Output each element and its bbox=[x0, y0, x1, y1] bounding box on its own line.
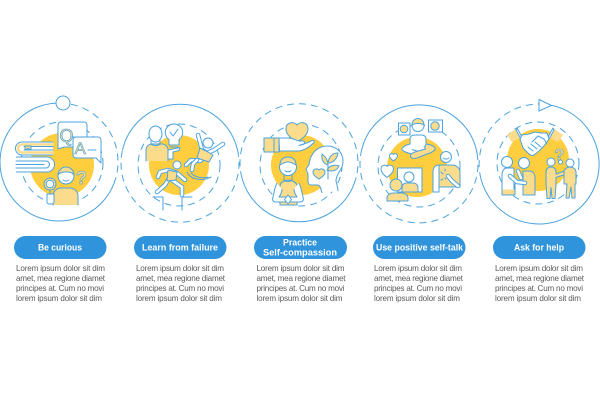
text block 2: lorem ipsum dolor sit dim bbox=[136, 294, 222, 303]
text block 2 bbox=[136, 264, 226, 303]
pill: use positive self-talk bbox=[373, 236, 466, 259]
pill: practice self-compassion: Self-compassion bbox=[263, 248, 337, 258]
outer ring 1 bbox=[0, 103, 118, 221]
icon: falling figure bbox=[186, 135, 223, 179]
text block 1: lorem ipsum dolor sit dim bbox=[16, 294, 102, 303]
text block 4: lorem ipsum dolor sit dim bbox=[374, 294, 460, 303]
icon: person with magnifier bbox=[44, 167, 78, 205]
icon: running figure bbox=[157, 161, 185, 195]
icon: emoticon bubble left bbox=[398, 123, 410, 135]
pill: practice self-compassion: Practice bbox=[283, 238, 317, 248]
icon: speech bubble A: A bbox=[74, 139, 86, 158]
text block 3 bbox=[256, 264, 346, 303]
outer ring 4 bbox=[360, 105, 478, 223]
text block 4: Lorem ipsum dolor sit dim bbox=[374, 264, 462, 273]
icon: left pair comforting bbox=[502, 156, 535, 195]
step 1: be curious bbox=[0, 96, 118, 221]
outer ring 2 bbox=[121, 104, 239, 222]
icon: person embracing self bbox=[273, 157, 303, 205]
text block 2: amet, mea regione diamet bbox=[136, 274, 226, 283]
yellow disc 2 bbox=[149, 135, 209, 195]
icon: head with plant bbox=[306, 146, 343, 193]
icon: light bulb with check bbox=[165, 124, 183, 147]
ring marker circle bbox=[56, 96, 70, 110]
icon: speech bubble Q: Q bbox=[60, 126, 74, 146]
text block 5: Lorem ipsum dolor sit dim bbox=[495, 264, 583, 273]
icon: small heart bbox=[390, 154, 398, 161]
text block 1: principes at. Cum no movi bbox=[16, 284, 104, 293]
text block 3: amet, mea regione diamet bbox=[256, 274, 346, 283]
text block 1: amet, mea regione diamet bbox=[16, 274, 106, 283]
text block 4 bbox=[374, 264, 464, 303]
pill: ask for help bbox=[493, 236, 586, 259]
pill: be curious: Be curious bbox=[38, 242, 82, 254]
step 3: practice self-compassion bbox=[240, 104, 358, 222]
text block 5: principes at. Cum no movi bbox=[495, 284, 583, 293]
text block 5 bbox=[495, 264, 585, 303]
text block 3: principes at. Cum no movi bbox=[256, 284, 345, 293]
yellow disc 3 bbox=[271, 135, 331, 195]
pill: learn from failure: Learn from failure bbox=[142, 242, 218, 254]
step 2: learn from failure bbox=[121, 104, 239, 222]
icon: right pair talking bbox=[546, 158, 576, 198]
icon: books bbox=[16, 142, 54, 172]
icon: meditating person bbox=[402, 118, 435, 158]
icon: platforms gap bbox=[153, 197, 192, 210]
text block 3: lorem ipsum dolor sit dim bbox=[256, 294, 343, 303]
pill: use positive self-talk: Use positive self-talk bbox=[376, 242, 464, 254]
icon: front person bbox=[387, 179, 408, 201]
text block 4: principes at. Cum no movi bbox=[374, 284, 462, 293]
pill: practice self-compassion bbox=[254, 236, 347, 259]
icon: person touching chest bbox=[433, 152, 460, 192]
inner dashed ring 1 bbox=[21, 122, 103, 204]
yellow disc 5 bbox=[507, 129, 569, 191]
icon: hand holding heart bbox=[264, 123, 314, 152]
text block 1 bbox=[16, 264, 106, 303]
icon: thinking person bbox=[146, 126, 180, 161]
text block 4: amet, mea regione diamet bbox=[374, 274, 464, 283]
triangle marker bbox=[539, 100, 552, 111]
text block 1: Lorem ipsum dolor sit dim bbox=[16, 264, 105, 273]
inner dashed ring 2 bbox=[138, 124, 220, 206]
icon: question mark: ? bbox=[554, 147, 564, 164]
text block 2: Lorem ipsum dolor sit dim bbox=[136, 264, 224, 273]
pill: ask for help: Ask for help bbox=[514, 242, 564, 254]
text block 5: amet, mea regione diamet bbox=[495, 274, 585, 283]
icon: thought dots bbox=[558, 160, 562, 164]
inner dashed ring 3 bbox=[260, 124, 342, 206]
inner dashed ring 4 bbox=[378, 125, 460, 207]
text block 3: Lorem ipsum dolor sit dim bbox=[256, 264, 345, 273]
pill: be curious bbox=[14, 236, 106, 259]
outer ring 5 bbox=[479, 104, 599, 224]
icon: handshake bbox=[507, 128, 563, 155]
step 4: use positive self-talk bbox=[360, 105, 478, 223]
inner dashed ring 5 bbox=[497, 122, 579, 204]
icon: large heart bbox=[381, 165, 394, 178]
icon: person on screen bbox=[398, 168, 422, 192]
icon: question mark: ? bbox=[76, 168, 87, 188]
icon: emoticon bubble right bbox=[428, 120, 442, 132]
outer ring 3 bbox=[240, 104, 358, 222]
pill: learn from failure bbox=[134, 236, 226, 259]
text block 5: lorem ipsum dolor sit dim bbox=[495, 294, 581, 303]
step 5: ask for help bbox=[479, 100, 599, 224]
yellow disc 4 bbox=[387, 137, 447, 197]
yellow disc 1 bbox=[30, 133, 94, 197]
text block 2: principes at. Cum no movi bbox=[136, 284, 224, 293]
